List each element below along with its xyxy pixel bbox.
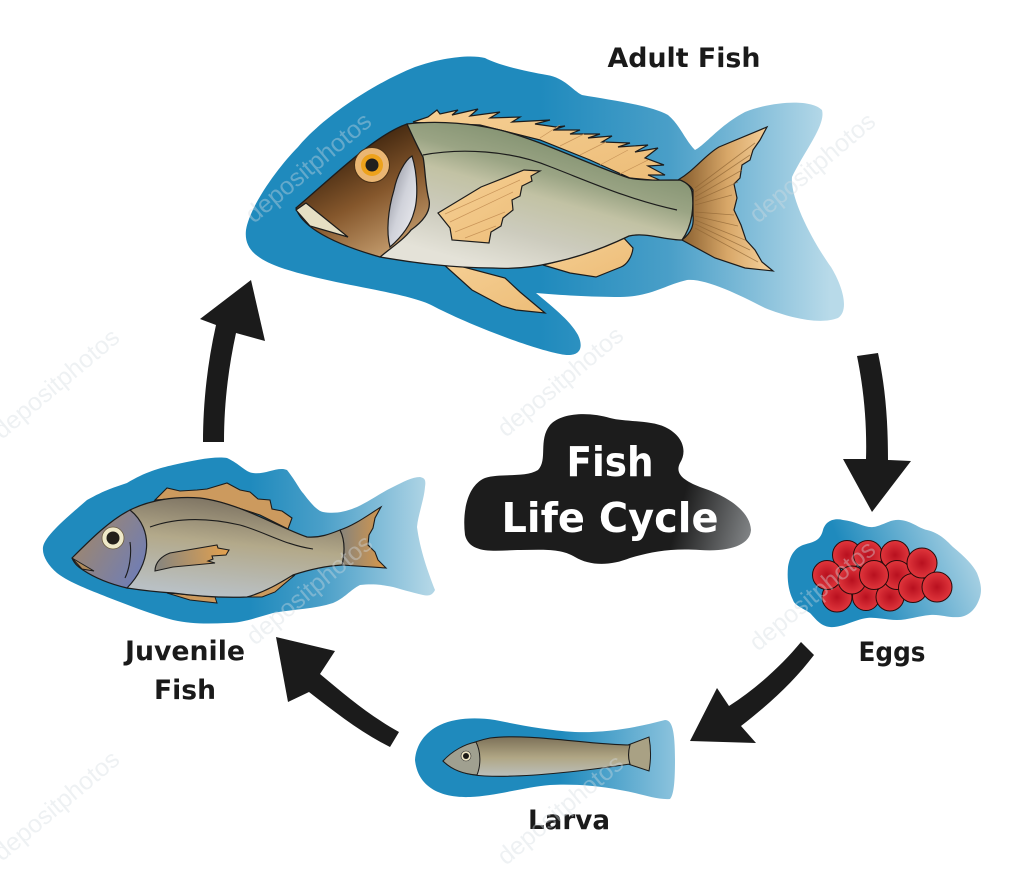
fin rays: dorsal bbox=[540, 125, 648, 174]
title bbox=[502, 438, 718, 542]
larva body bbox=[443, 737, 630, 776]
panel: central title bbox=[464, 414, 751, 564]
juvenile gill line bbox=[125, 542, 131, 578]
fish head bbox=[296, 124, 429, 257]
panel: juvenile fish bbox=[43, 457, 435, 706]
water blob: adult bbox=[246, 56, 844, 355]
water blob: juvenile bbox=[43, 457, 435, 624]
juvenile lower fins bbox=[247, 575, 295, 597]
fin rays: tail bbox=[695, 143, 758, 262]
arrow: adult to eggs bbox=[843, 353, 911, 512]
watermark: depositphotos bbox=[241, 529, 378, 651]
watermark: depositphotos bbox=[492, 321, 629, 443]
juvenile eye bbox=[102, 527, 124, 549]
juvenile tail bbox=[340, 507, 386, 568]
juvenile lateral line bbox=[150, 520, 313, 549]
label: juvenile fish: Fish bbox=[154, 675, 216, 706]
arrow: eggs to larva bbox=[690, 642, 814, 743]
watermark: depositphotos bbox=[744, 535, 881, 657]
label: eggs: Eggs bbox=[858, 637, 926, 668]
title: Fish bbox=[566, 438, 654, 486]
fin rays: pectoral bbox=[445, 180, 520, 238]
juvenile pectoral fin bbox=[155, 545, 229, 571]
anal fin bbox=[543, 235, 633, 277]
fish body bbox=[380, 122, 693, 268]
gill cover bbox=[388, 156, 417, 247]
title: Life Cycle bbox=[502, 494, 718, 542]
label: juvenile fish bbox=[123, 636, 245, 706]
larva head bbox=[443, 742, 480, 775]
juvenile dorsal fin bbox=[155, 483, 292, 529]
watermark: depositphotos bbox=[744, 107, 881, 229]
mouth bbox=[296, 203, 348, 237]
arrow: juvenile to adult bbox=[200, 280, 265, 442]
juvenile body bbox=[127, 498, 344, 597]
label: juvenile fish: Juvenile bbox=[123, 636, 245, 667]
egg cluster bbox=[812, 540, 952, 612]
watermark: depositphotos bbox=[240, 107, 377, 229]
watermark bbox=[0, 107, 881, 871]
juvenile mouth bbox=[72, 558, 94, 571]
label: larva: Larva bbox=[528, 805, 610, 836]
watermark: depositphotos bbox=[492, 749, 629, 871]
title blob bbox=[464, 414, 751, 564]
label: adult fish: Adult Fish bbox=[608, 43, 760, 74]
lateral line bbox=[423, 151, 677, 210]
larva eye bbox=[461, 751, 471, 761]
panel: eggs bbox=[788, 519, 981, 668]
arrow: larva to juvenile bbox=[276, 637, 399, 747]
tail fin bbox=[678, 127, 773, 271]
dorsal fin bbox=[413, 109, 665, 181]
larva tail bbox=[628, 737, 650, 771]
panel: adult fish bbox=[246, 43, 844, 355]
eye bbox=[354, 148, 390, 182]
panel: larva bbox=[415, 718, 675, 836]
juvenile head bbox=[72, 510, 147, 588]
water blob: eggs bbox=[788, 519, 981, 627]
water blob: larva bbox=[415, 718, 675, 799]
pectoral fin bbox=[438, 170, 540, 243]
ventral fin bbox=[442, 263, 545, 313]
